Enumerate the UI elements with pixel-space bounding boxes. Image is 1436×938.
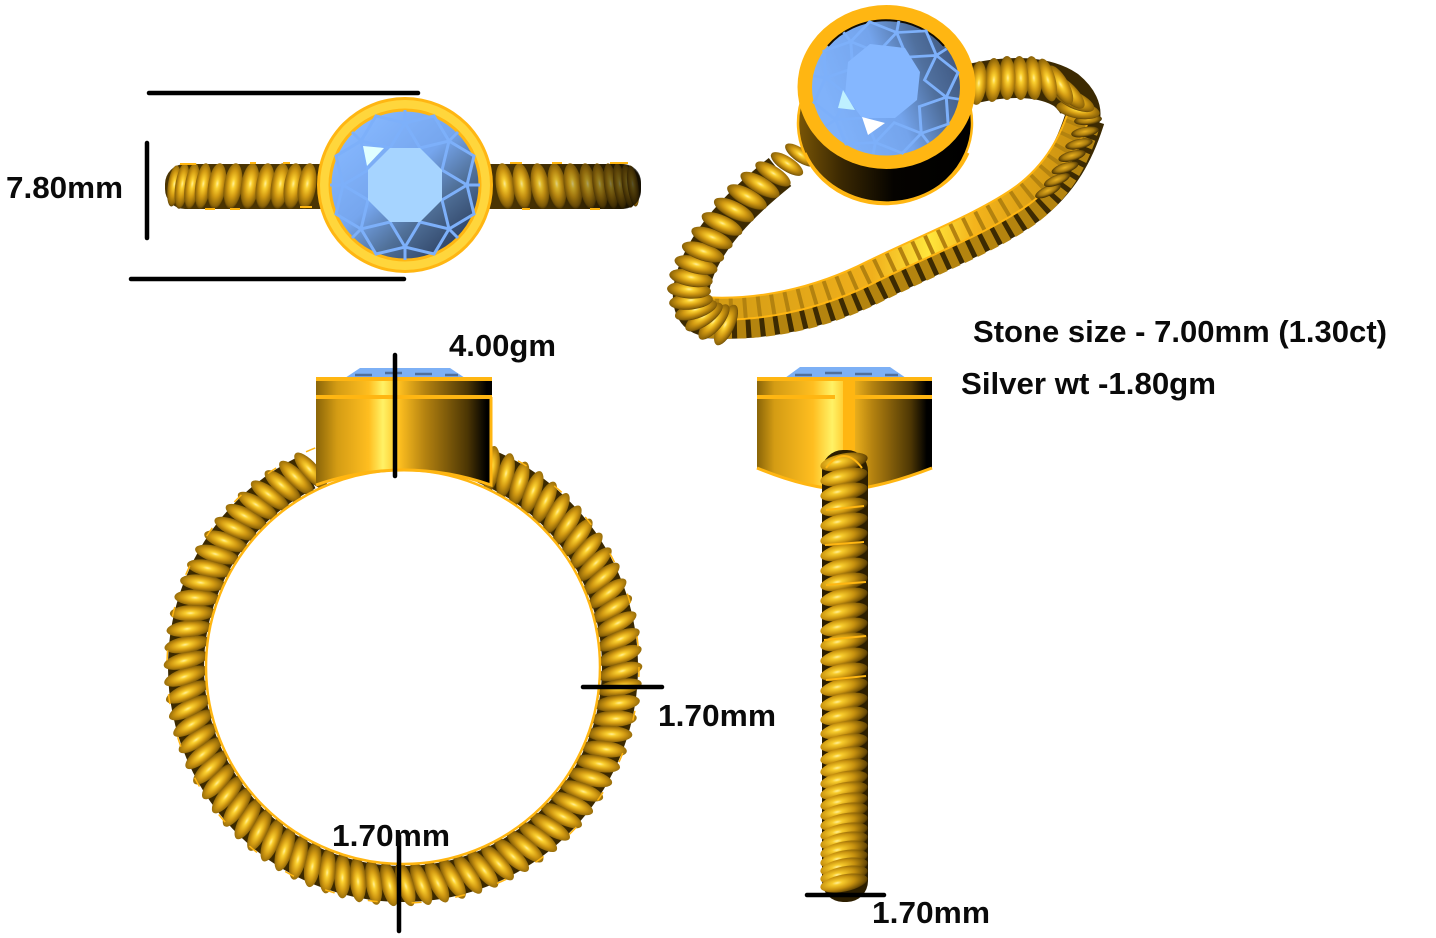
front view ring	[121, 368, 685, 938]
side view ring	[757, 367, 932, 902]
label: shank thickness side: 1.70mm	[658, 698, 776, 733]
front view bezel	[316, 378, 492, 485]
side view bezel	[757, 378, 932, 490]
perspective bezel lower edge	[805, 153, 968, 203]
perspective bezel	[798, 5, 976, 169]
perspective view ring	[666, 5, 1102, 349]
side view stone top	[785, 367, 906, 378]
label: shank thickness bottom: 1.70mm	[332, 818, 450, 853]
top view stone	[330, 110, 480, 260]
label: silver weight: Silver wt -1.80gm	[961, 366, 1216, 401]
label: total weight: 4.00gm	[449, 328, 556, 363]
top view bezel	[317, 97, 493, 273]
perspective coils, back	[968, 55, 1102, 201]
perspective bezel underside	[798, 42, 972, 204]
perspective coils, left	[666, 139, 818, 349]
label: stone size: Stone size - 7.00mm (1.30ct)	[973, 314, 1387, 349]
side view shank	[819, 449, 869, 902]
label: stone width: 7.80mm	[6, 170, 123, 205]
dimension lines	[131, 93, 884, 931]
front view shank	[121, 385, 685, 938]
perspective front band	[701, 108, 1089, 329]
perspective shank base	[691, 78, 1080, 318]
front view stone top	[345, 368, 465, 378]
label: shank width: 1.70mm	[872, 895, 990, 930]
top view bezel inner rim	[320, 100, 490, 270]
top view shank	[165, 162, 641, 210]
top view ring	[165, 97, 641, 273]
perspective stone	[800, 9, 972, 166]
